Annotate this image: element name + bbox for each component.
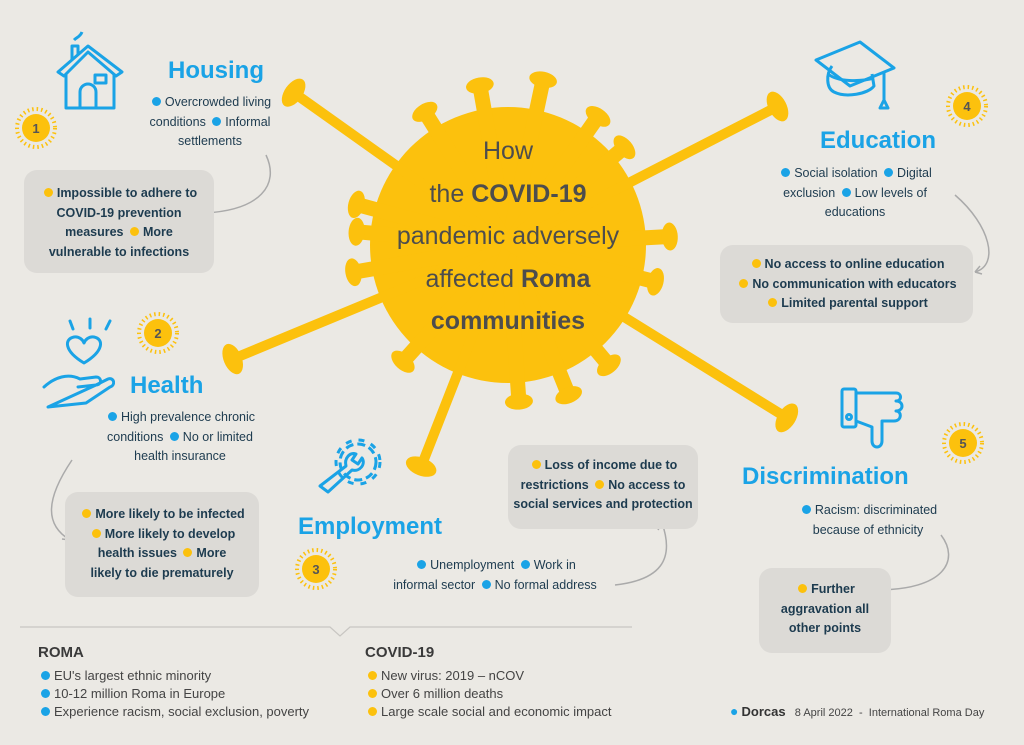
box: education effects: Limited parental support [781,296,928,310]
text: education [781,166,932,219]
badge 5: 5 [959,436,967,451]
text: health [107,410,255,463]
badge 1: 1 [32,121,40,136]
footer: covid facts: New virus: 2019 – nCOV [381,668,524,683]
box: housing effects: COVID-19 prevention [56,206,182,220]
text: health: health insurance [134,449,226,463]
box: housing effects: vulnerable to infections [49,244,189,258]
heading: health: Health [130,372,203,399]
box: discrimination effects: aggravation all [781,602,869,616]
text: discrimination: because of ethnicity [813,522,923,536]
badge 4 [946,85,988,127]
center title: pandemic adversely [397,222,619,250]
icon: heart in hand [42,318,115,408]
box: employment effects [508,445,698,529]
heading: education: Education [820,127,936,154]
box: education effects: No access to online education [765,257,944,271]
footer: roma facts: EU's largest ethnic minority [54,668,211,683]
text: housing: conditions Informal [150,114,270,128]
footer: credit: ● Dorcas 8 April 2022 - International Roma Day [730,703,984,719]
box: discrimination effects: other points [789,621,861,635]
box: housing effects: measures More [65,225,173,239]
footer: covid facts: Large scale social and economic impact [381,704,612,719]
badge 2: 2 [154,326,162,341]
box: employment effects: social services and protection [513,497,693,511]
box: discrimination effects [759,568,891,653]
box: housing effects [24,170,214,273]
center title: How [483,137,533,165]
badge 1 [15,107,57,149]
text: education: educations [825,205,885,219]
heading: housing: Housing [168,57,264,84]
footer: covid facts: COVID-19 [365,644,434,661]
badge 3: 3 [312,562,320,577]
badge 3 [295,548,337,590]
center title: communities [431,307,585,335]
badge 2 [137,312,179,354]
box: employment effects: Loss of income due to [545,458,677,472]
center title [397,137,619,335]
footer: roma facts [38,644,309,719]
icon: graduation cap [814,40,896,110]
box: discrimination effects: Further [811,582,855,596]
text: employment [393,558,597,592]
text: discrimination [802,503,937,536]
icon: thumbs down [840,388,904,448]
box: health effects: More likely to develop [105,526,235,540]
box: health effects: likely to die prematurely [90,566,234,580]
text: education: Social isolation Digital [794,166,932,180]
text: employment: Unemployment Work in [430,558,576,572]
box: health effects: More likely to be infected [95,507,245,521]
box: health effects [65,492,259,597]
box: health effects: health issues More [98,546,226,560]
text: health: High prevalence chronic [121,410,255,424]
text: housing: settlements [178,134,242,148]
text: employment: informal sector No formal address [393,578,597,592]
footer: roma facts: 10-12 million Roma in Europe [54,686,225,701]
box: employment effects: restrictions No access to [521,478,685,492]
center title: the COVID-19 [429,180,586,208]
footer: covid facts: Over 6 million deaths [381,686,503,701]
icon: house [56,32,124,110]
text: housing [150,95,271,148]
box: education effects: No communication with educators [752,276,957,290]
footer: covid facts [365,644,612,719]
footer: roma facts: ROMA [38,644,84,661]
center title: affected Roma [426,264,590,292]
box: education effects [720,245,973,323]
heading: discrimination: Discrimination [742,463,909,490]
text: education: exclusion Low levels of [783,186,927,200]
footer: roma facts: Experience racism, social exclusion, poverty [54,704,309,719]
text: discrimination: Racism: discriminated [815,503,937,517]
heading: employment: Employment [298,513,442,540]
badge 4: 4 [963,99,971,114]
badge 5 [942,422,984,464]
box: housing effects: Impossible to adhere to [57,186,197,200]
text: housing: Overcrowded living [165,95,271,109]
text: health: conditions No or limited [107,430,253,444]
icon: gear wrench [318,438,382,494]
